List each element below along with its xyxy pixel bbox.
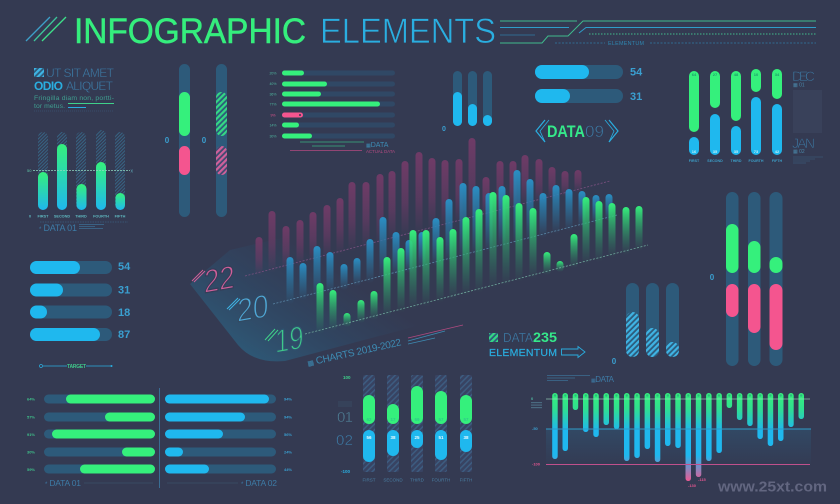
bars: data 02: 56% xyxy=(284,432,292,437)
diverging bar chart: 01 and 02: 56 xyxy=(366,435,372,440)
chart: hatched tracks: 0 xyxy=(612,357,617,366)
badge: data09: 09 xyxy=(585,122,604,141)
stacked bar chart: 64 xyxy=(692,72,697,77)
text block: data235: ELEMENTUM xyxy=(489,347,557,359)
target scale xyxy=(40,364,112,370)
chart: paired vertical tracks: 0 xyxy=(202,136,207,145)
year label: 19 xyxy=(265,319,304,360)
row: 2022 bars xyxy=(256,138,582,276)
drop bar chart: -130 xyxy=(688,483,697,488)
badge: data09: DATA xyxy=(547,123,585,141)
horizontal bar list: ACTUAL DATA xyxy=(366,149,395,154)
diverging bar chart: 01 and 02: SECOND xyxy=(383,478,403,482)
bars: data 01: 91% xyxy=(27,432,35,437)
date panel: dec and jan: JAN xyxy=(792,135,815,151)
horizontal bar list: 14% xyxy=(269,124,277,128)
horizontal bars: 54 and 31 xyxy=(535,65,643,103)
chart: paired vertical tracks: 0 xyxy=(165,136,170,145)
horizontal bars: 54 and 31: 31 xyxy=(630,91,642,103)
horizontal bars: 54 and 31: 54 xyxy=(630,66,643,78)
chart: three blue tracks: 0 xyxy=(442,126,446,133)
horizontal bar list: 30% xyxy=(269,134,277,138)
diverging bar chart: 01 and 02: 01 xyxy=(337,409,353,426)
bars: data 02: 44% xyxy=(284,467,292,472)
bar chart: data 01: SECOND xyxy=(54,214,70,218)
diverging bar chart: 01 and 02: 25 xyxy=(414,435,420,440)
icon: title slashes xyxy=(26,17,66,41)
text block: ut sit amet: Fringilla diam non, portti- xyxy=(34,95,114,102)
bars: data 02: * DATA 02 xyxy=(241,478,277,488)
horizontal bar list: 9% xyxy=(270,114,276,118)
legend: data: ▦DATA xyxy=(366,142,389,149)
header circuit lines xyxy=(500,21,816,47)
drop bar chart: -115 xyxy=(698,477,707,482)
diverging bar chart: 01 and 02: FOURTH xyxy=(432,478,450,482)
horizontal bar list xyxy=(269,70,395,154)
header label: ELEMENTUM xyxy=(608,41,644,47)
chart: paired vertical tracks xyxy=(165,64,227,217)
stacked bar chart: 35 xyxy=(734,149,739,154)
horizontal bars: 54 31 18 87: 54 xyxy=(118,261,131,273)
diverging bar chart: 01 and 02: FIRST xyxy=(362,478,376,482)
icon: arrow xyxy=(562,346,585,358)
drop bar chart xyxy=(531,375,811,488)
bar chart: data 01: THIRD xyxy=(75,214,87,218)
horizontal bar list: 20% xyxy=(269,72,277,76)
stacked bar chart: 10 xyxy=(754,72,759,77)
chart: green and pink tracks xyxy=(710,192,782,366)
horizontal bars: 54 31 18 87: 31 xyxy=(118,284,130,296)
diverging bar chart: 01 and 02: FIFTH xyxy=(460,478,472,482)
diverging bar chart: 01 and 02: 51 xyxy=(438,435,444,440)
stacked bar chart xyxy=(689,69,782,163)
stacked bar chart: 16 xyxy=(692,149,697,154)
chart platform xyxy=(190,210,470,361)
stacked bar chart: 48 xyxy=(734,72,739,77)
diverging bar chart: 01 and 02: 57 xyxy=(438,417,444,422)
year label: 19: 19 xyxy=(275,319,304,360)
legend: data 01: * DATA 01 xyxy=(39,223,77,233)
date panel: dec and jan xyxy=(792,68,823,163)
drop bar chart: 0 xyxy=(531,396,534,401)
chart caption: ▦ CHARTS 2019-2022 xyxy=(306,337,403,369)
diverging bar chart: 01 and 02: 38 xyxy=(463,435,469,440)
stacked bar chart: 42 xyxy=(775,149,780,154)
bars: data 01: * DATA 01 xyxy=(45,478,81,488)
diverging bar chart: 01 and 02: 17 xyxy=(390,417,396,422)
text block: ut sit amet: UT SIT AMET xyxy=(46,66,115,80)
horizontal bar list: 77% xyxy=(269,102,277,106)
title xyxy=(26,12,496,51)
drop bar chart: -50 xyxy=(532,426,539,431)
bars: data 01 xyxy=(27,394,155,488)
row: 2019 bars xyxy=(316,192,642,334)
heading: elements: ELEMENTS xyxy=(320,12,496,51)
legend: data: ▦DATA xyxy=(591,375,615,384)
bars: data 02: 94% xyxy=(284,396,292,402)
stacked bar chart: 27 xyxy=(713,72,718,77)
stacked bar chart: SECOND xyxy=(707,159,723,163)
diverging bar chart: 01 and 02: 57 xyxy=(463,417,469,422)
year label: 22 xyxy=(192,258,235,300)
bar chart: data 01: x xyxy=(130,168,134,174)
horizontal bars: 54 31 18 87 xyxy=(30,261,131,341)
diverging bar chart: 01 and 02: 62 xyxy=(366,417,372,422)
panel: data 01 and data 02 bars xyxy=(27,388,292,488)
bars: data 01: 57% xyxy=(27,414,35,420)
date panel: dec and jan: DEC xyxy=(792,68,815,84)
date panel: dec and jan: ▦ 01 xyxy=(793,82,805,88)
bar chart: data 01: FIFTH xyxy=(115,214,126,218)
text block: data235: 235 xyxy=(533,329,557,345)
text block: ut sit amet: ALIQUET xyxy=(66,79,114,93)
stacked bar chart: 34 xyxy=(775,72,780,77)
bar chart: data 01 xyxy=(27,130,134,233)
horizontal bars: 54 31 18 87: 18 xyxy=(118,307,130,319)
bars: data 01: 30% xyxy=(27,450,35,454)
year label: 22: 22 xyxy=(204,258,235,300)
bars: data 02 xyxy=(165,394,292,488)
text block: data235: DATA xyxy=(503,330,533,345)
diverging bar chart: 01 and 02: THIRD xyxy=(410,478,425,482)
diverging bar chart: 01 and 02: 100 xyxy=(343,375,351,380)
diverging bar chart: 01 and 02: 38 xyxy=(390,435,396,440)
date panel: dec and jan: ▦ 02 xyxy=(793,149,805,155)
isometric chart 2019-2022 xyxy=(190,138,648,369)
bar chart: data 01: 50 xyxy=(27,168,32,173)
watermark: www.25xt.com xyxy=(717,478,827,496)
bar chart: data 01: FOURTH xyxy=(93,214,109,218)
bars: data 02: 94% xyxy=(284,414,292,420)
year label: 20: 20 xyxy=(237,287,269,329)
chart: green and pink tracks: 0 xyxy=(710,273,715,282)
bars: data 01: 64% xyxy=(27,396,35,402)
stacked bar chart: THIRD xyxy=(731,159,742,163)
bar chart: data 01: FIRST xyxy=(38,214,49,218)
stacked bar chart: FIFTH xyxy=(772,159,782,163)
bars: data 02: 24% xyxy=(284,450,292,454)
diverging bar chart: 01 and 02: 02 xyxy=(336,432,353,449)
heading: infographic: INFOGRAPHIC xyxy=(74,12,306,51)
year label: 20 xyxy=(227,287,269,329)
drop bar chart: -100 xyxy=(532,462,541,466)
row: 2020 bars xyxy=(286,170,612,304)
chart: hatched tracks xyxy=(612,283,679,366)
stacked bar chart: 35 xyxy=(713,149,718,154)
diverging bar chart: 01 and 02: -100 xyxy=(341,469,351,474)
text block: data235 xyxy=(489,329,585,359)
diverging bar chart: 01 and 02: 69 xyxy=(414,417,420,422)
horizontal bar list: 40% xyxy=(269,82,277,86)
legend: data xyxy=(547,375,615,384)
badge: data09 xyxy=(536,120,618,142)
horizontal bar list: 36% xyxy=(269,92,277,96)
diverging bar chart: 01 and 02 xyxy=(336,375,472,482)
stacked bar chart: FOURTH xyxy=(749,159,764,163)
stacked bar chart: 73 xyxy=(754,149,759,154)
chart: three blue tracks xyxy=(442,71,492,133)
bar chart: data 01: 0 xyxy=(29,214,31,218)
text block: ut sit amet: ODIO xyxy=(34,79,63,93)
text block: ut sit amet xyxy=(34,66,115,111)
bars: data 01: 59% xyxy=(27,467,35,472)
horizontal bars: 54 31 18 87: 87 xyxy=(118,329,130,341)
stacked bar chart: FIRST xyxy=(689,159,700,163)
target scale: TARGET xyxy=(67,364,86,370)
text block: ut sit amet: tor metus. xyxy=(34,103,65,110)
